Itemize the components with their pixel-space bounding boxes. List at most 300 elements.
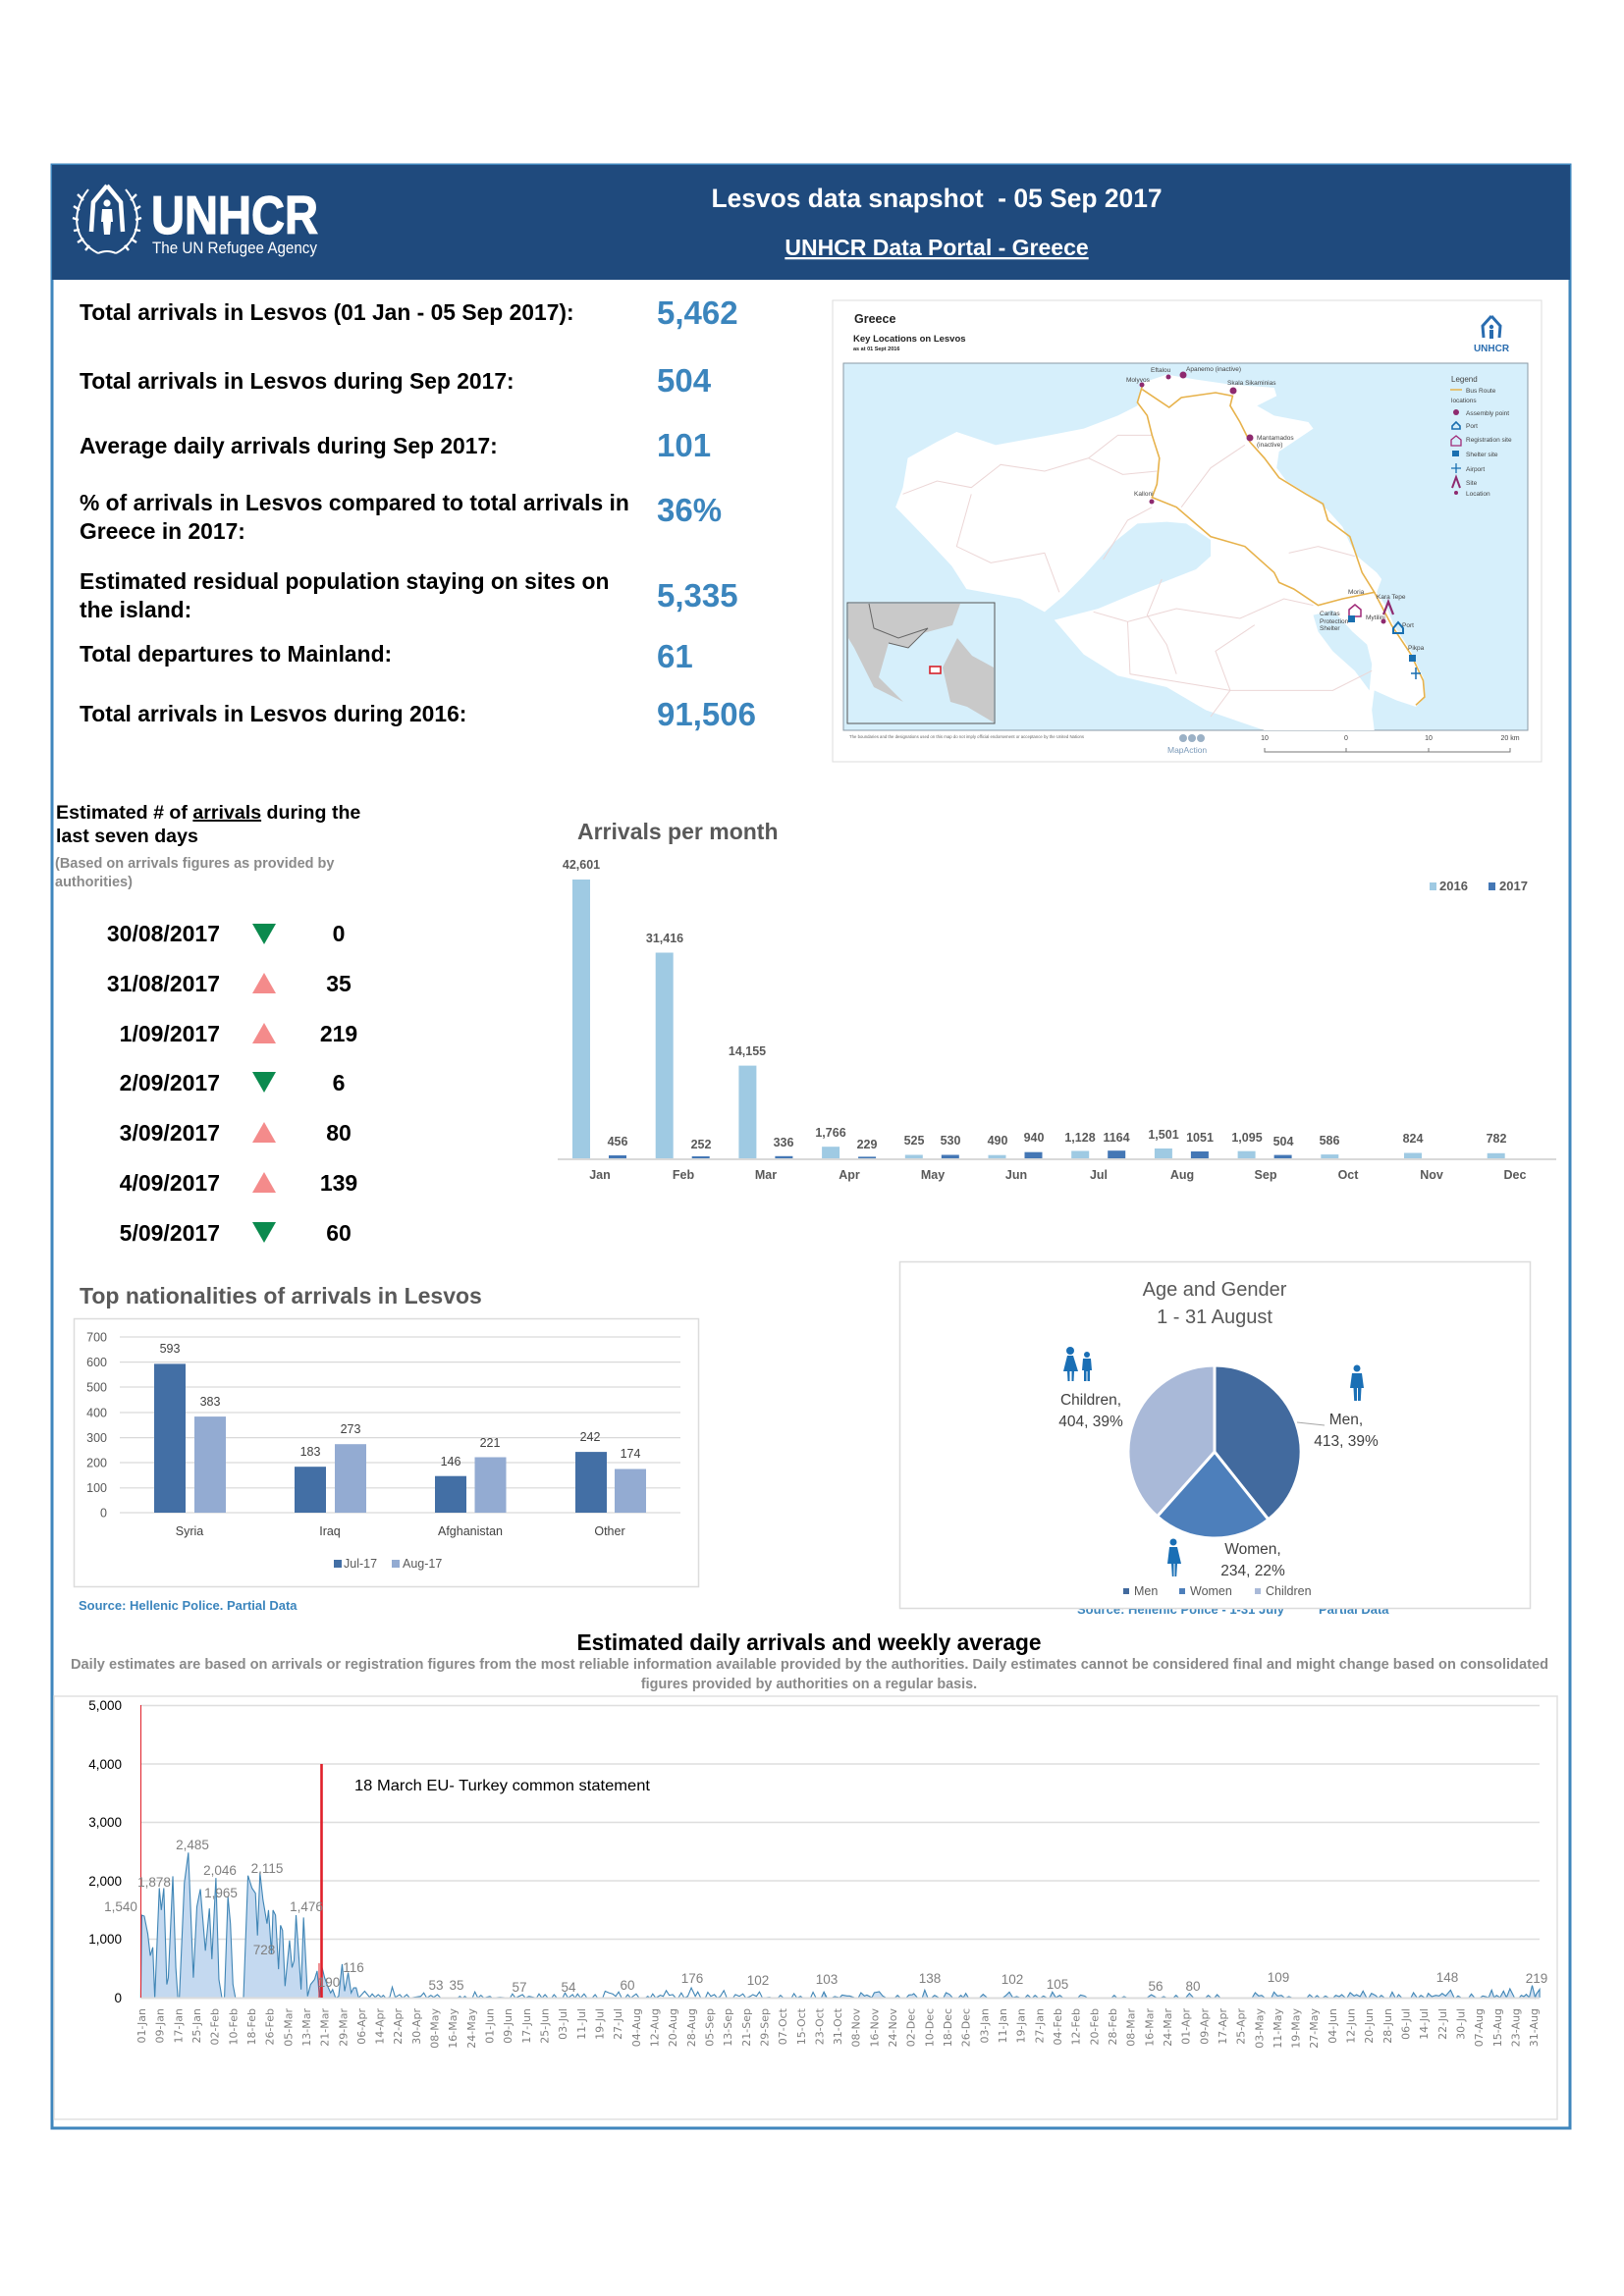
categories: Other — [594, 1524, 625, 1538]
date axis labels: 03-May — [1253, 2008, 1266, 2049]
date axis labels: 25-Apr — [1235, 2008, 1248, 2045]
y axis — [88, 1698, 122, 2005]
y axis — [86, 1331, 107, 1520]
bar values — [160, 1342, 640, 1468]
map footer: 10 — [1261, 735, 1269, 742]
pie legend: Children — [1266, 1584, 1312, 1598]
bar values: 593 — [160, 1342, 180, 1356]
date axis labels: 20-Jun — [1363, 2008, 1376, 2044]
date axis labels: 26-Dec — [960, 2008, 973, 2047]
date axis labels: 14-Apr — [374, 2008, 387, 2045]
data labels: 2,046 — [203, 1863, 237, 1878]
month axis labels: Aug — [1170, 1168, 1194, 1182]
data labels: 1,965 — [204, 1886, 238, 1900]
month data labels: 525 — [904, 1134, 924, 1148]
map legend: Site — [1466, 480, 1478, 487]
month data labels: 456 — [608, 1135, 627, 1148]
month axis labels — [589, 1168, 1527, 1182]
row: 30/08/2017: 30/08/2017 — [107, 921, 220, 946]
map logo: UNHCR — [1474, 344, 1510, 354]
date axis labels: 06-Apr — [355, 2008, 368, 2045]
seven-day heading: Estimated # of arrivals during the — [56, 802, 360, 824]
month data labels: 42,601 — [563, 858, 600, 872]
y axis: 2,000 — [88, 1874, 122, 1889]
y axis: 5,000 — [88, 1698, 122, 1713]
date axis labels: 24-May — [465, 2008, 478, 2049]
month axis labels: Jun — [1005, 1168, 1027, 1182]
date axis labels: 25-Jan — [190, 2008, 203, 2044]
data labels: 102 — [747, 1973, 769, 1988]
stat: 2016 arrivals: 91,506 — [657, 696, 756, 732]
map place labels: Moria — [1348, 589, 1365, 596]
month axis labels: Jan — [589, 1168, 611, 1182]
date axis labels: 17-Jan — [172, 2008, 185, 2044]
row: 3/09/2017: 3/09/2017 — [120, 1120, 220, 1146]
month data labels: 1,766 — [815, 1126, 846, 1140]
stat: 2016 arrivals: Total arrivals in Lesvos during 2016: — [80, 701, 466, 726]
date axis labels: 29-Sep — [758, 2008, 771, 2047]
map heading — [853, 312, 966, 352]
date axis labels: 09-Jan — [154, 2008, 167, 2044]
zero axis line — [140, 1997, 1540, 1999]
label: women: 234, 22% — [1220, 1563, 1285, 1579]
label: men: Men, — [1329, 1412, 1363, 1428]
date axis labels: 22-Jul — [1436, 2008, 1449, 2040]
data labels — [104, 1838, 1547, 1995]
month axis labels: Sep — [1255, 1168, 1277, 1182]
row: 31/08/2017 — [107, 971, 352, 996]
row: 1/09/2017 — [120, 1021, 357, 1046]
bar values: 174 — [621, 1447, 640, 1461]
date axis labels: 26-Feb — [264, 2008, 277, 2045]
map footer — [849, 734, 1520, 755]
stat: arrivals in Sep: Total arrivals in Lesvos during Sep 2017: — [80, 368, 514, 394]
row: 30/08/2017: 0 — [333, 921, 345, 946]
data labels: 109 — [1268, 1970, 1289, 1985]
map heading: as at 01 Sept 2016 — [853, 347, 899, 352]
map heading: Greece — [854, 312, 895, 326]
month axis labels: Jul — [1090, 1168, 1108, 1182]
logo tagline: The UN Refugee Agency — [152, 240, 318, 257]
seven-day arrivals panel — [55, 802, 360, 1246]
y axis: 1,000 — [88, 1932, 122, 1947]
bar values: 383 — [200, 1395, 220, 1409]
row: 4/09/2017 — [120, 1170, 357, 1196]
data labels: 728 — [253, 1943, 275, 1957]
daily chart note second line: figures provided by authorities on a regular basis. — [641, 1677, 977, 1692]
date axis labels: 05-Sep — [703, 2008, 717, 2047]
map legend: Location — [1466, 491, 1490, 498]
row: 1/09/2017: 1/09/2017 — [120, 1021, 220, 1046]
date axis labels: 03-Jul — [557, 2008, 569, 2040]
stat: share of Greece: 36% — [657, 492, 722, 528]
legend: Jul-17 / Aug-17 — [334, 1557, 442, 1571]
y axis: 200 — [86, 1457, 107, 1470]
stat: share of Greece: Greece in 2017: — [80, 518, 245, 544]
data labels: 56 — [1148, 1979, 1164, 1994]
red reference lines — [141, 1705, 322, 1998]
daily series 2016-2017 tail — [822, 1986, 1540, 1998]
data labels: 2,115 — [251, 1861, 283, 1876]
data labels: 1,540 — [104, 1899, 137, 1914]
month axis labels: Apr — [839, 1168, 860, 1182]
map legend — [1450, 375, 1512, 498]
map footer: 10 — [1425, 735, 1433, 742]
date axis labels: 20-Feb — [1088, 2008, 1101, 2045]
stat: arrivals in Sep — [80, 362, 712, 399]
stat: average daily: 101 — [657, 427, 711, 463]
clipped source note behind pie panel: Partial Data — [1319, 1602, 1389, 1617]
pie legend: Men — [1134, 1584, 1158, 1598]
seven-day heading: last seven days — [56, 826, 198, 847]
map legend: Port — [1466, 423, 1478, 430]
data labels: 102 — [1001, 1972, 1023, 1987]
y axis: 0 — [100, 1506, 107, 1520]
month data labels: 504 — [1273, 1135, 1293, 1148]
date axis labels: 04-Aug — [630, 2008, 643, 2047]
stat: average daily: Average daily arrivals during Sep 2017: — [80, 433, 498, 458]
month axis labels: Mar — [755, 1168, 777, 1182]
date axis labels: 31-Oct — [832, 2007, 844, 2045]
date axis labels: 27-Jul — [612, 2008, 624, 2040]
date axis labels: 21-Sep — [740, 2008, 753, 2047]
logo wordmark: UNHCR — [151, 185, 318, 245]
data labels: 1,476 — [290, 1899, 323, 1914]
icon: UNHCR emblem — [73, 186, 141, 253]
date axis labels: 19-Jul — [593, 2008, 607, 2040]
legend: 2016 / 2017: 2017 — [1499, 879, 1528, 893]
date axis labels: 15-Oct — [795, 2007, 808, 2045]
month data labels: 1164 — [1103, 1131, 1130, 1145]
month data labels: 1051 — [1186, 1131, 1214, 1145]
map legend: Legend — [1451, 375, 1478, 384]
date axis labels: 12-Feb — [1070, 2008, 1083, 2045]
month axis labels: Nov — [1420, 1168, 1443, 1182]
categories: Iraq — [319, 1524, 341, 1538]
date axis labels: 28-Aug — [685, 2008, 698, 2047]
map markers — [1139, 371, 1421, 679]
date axis labels: 09-Jun — [502, 2008, 514, 2044]
date axis labels: 16-May — [447, 2008, 460, 2049]
page frame — [52, 165, 1570, 2128]
daily series 2016 early peak — [140, 1852, 835, 1998]
map place labels: Apanemo (inactive) — [1186, 366, 1241, 373]
data labels: 138 — [919, 1971, 941, 1986]
stat: total arrivals: Total arrivals in Lesvos (01 Jan - 05 Sep 2017): — [80, 299, 574, 325]
date axis labels: 12-Jun — [1345, 2008, 1358, 2044]
map place labels: Eftalou — [1151, 367, 1171, 374]
row: 2/09/2017 — [120, 1070, 345, 1095]
month data labels: 824 — [1403, 1132, 1423, 1146]
map footer: 20 km — [1500, 735, 1520, 742]
date axis labels: 01-Jun — [483, 2008, 497, 2044]
map place labels: Pikpa — [1408, 645, 1425, 652]
map legend: Registration site — [1466, 437, 1512, 444]
map place labels: Skala Sikaminias — [1227, 380, 1276, 387]
map sea — [843, 363, 1528, 730]
date axis labels: 29-Mar — [337, 2008, 350, 2047]
portal link: UNHCR Data Portal - Greece — [785, 235, 1089, 260]
map legend: Bus Route — [1466, 388, 1496, 395]
month data labels: 586 — [1320, 1134, 1339, 1148]
date axis labels: 30-Jul — [1455, 2008, 1467, 2040]
data labels: 219 — [1526, 1971, 1547, 1986]
date axis labels: 11-Jan — [997, 2008, 1009, 2044]
y axis: 700 — [86, 1331, 107, 1345]
month data labels: 1,095 — [1231, 1131, 1263, 1145]
date axis labels: 28-Jun — [1381, 2008, 1394, 2044]
map panel — [833, 300, 1542, 762]
map legend: locations — [1451, 398, 1477, 404]
map legend: Airport — [1466, 466, 1485, 473]
bar values: 146 — [441, 1455, 460, 1468]
month data labels: 1,128 — [1064, 1131, 1096, 1145]
label: women: Women, — [1224, 1541, 1281, 1558]
date axis labels: 04-Feb — [1052, 2008, 1064, 2045]
date axis labels: 28-Feb — [1107, 2008, 1119, 2045]
map place labels: Protection — [1320, 618, 1349, 625]
date axis labels: 08-May — [429, 2008, 442, 2049]
map legend: Assembly point — [1466, 410, 1509, 417]
date axis labels: 16-Nov — [868, 2008, 881, 2047]
label: men: 413, 39% — [1314, 1433, 1379, 1450]
date axis labels: 02-Dec — [905, 2008, 918, 2047]
row: 31/08/2017: 31/08/2017 — [107, 971, 220, 996]
pie legend — [1123, 1584, 1312, 1598]
stat: residual population: Estimated residual population staying on sites on — [80, 568, 609, 594]
date axis labels: 23-Aug — [1510, 2008, 1522, 2047]
callout: EU-Turkey statement: 18 March EU- Turkey common statement — [354, 1778, 651, 1794]
y axis: 0 — [114, 1991, 122, 2005]
stat: departures — [80, 638, 693, 674]
map legend: Shelter site — [1466, 452, 1498, 458]
y axis: 500 — [86, 1380, 107, 1394]
y axis: 3,000 — [88, 1815, 122, 1830]
date axis labels: 21-Mar — [319, 2008, 332, 2047]
label: children: Children, — [1060, 1392, 1121, 1409]
legend: 2016 / 2017: 2016 — [1439, 879, 1468, 893]
stat: residual population: 5,335 — [657, 577, 738, 614]
legend: 2016 / 2017 — [1430, 879, 1528, 893]
row: 5/09/2017: 5/09/2017 — [120, 1220, 220, 1246]
header band — [52, 165, 1570, 280]
row: 4/09/2017: 4/09/2017 — [120, 1170, 220, 1196]
stat: share of Greece: % of arrivals in Lesvos compared to total arrivals in — [80, 490, 629, 515]
date axis labels: 10-Feb — [227, 2008, 240, 2045]
icon: woman — [1167, 1539, 1181, 1576]
data labels: 53 — [428, 1978, 444, 1993]
month data labels: 940 — [1024, 1131, 1044, 1145]
bars Jul-17 — [154, 1363, 607, 1513]
title: Lesvos data snapshot - 05 Sep 2017 — [711, 184, 1163, 213]
data labels: 105 — [1047, 1977, 1068, 1992]
date axis labels: 22-Apr — [392, 2008, 405, 2045]
bars Aug-17 — [194, 1416, 646, 1513]
date axis labels: 23-Oct — [813, 2007, 826, 2045]
seven-day note: (Based on arrivals figures as provided by — [55, 856, 334, 872]
daily chart note: Daily estimates are based on arrivals or registration figures from the most reliable information available provided by the authorities. Daily estimates cannot be considered final and might change based on consolidated — [71, 1657, 1548, 1673]
pie title: Age and Gender — [1143, 1279, 1287, 1301]
y axis: 4,000 — [88, 1757, 122, 1772]
map heading: Key Locations on Lesvos — [853, 334, 966, 345]
stat: arrivals in Sep: 504 — [657, 362, 712, 399]
date axis labels: 06-Jul — [1400, 2008, 1412, 2040]
row: 5/09/2017 — [120, 1220, 352, 1246]
map footer: MapAction — [1167, 745, 1207, 755]
data labels: 148 — [1436, 1970, 1458, 1985]
row: 1/09/2017: 219 — [320, 1021, 357, 1046]
categories: Afghanistan — [438, 1524, 503, 1538]
date axis labels: 12-Aug — [648, 2008, 662, 2047]
map place labels: Kalloni — [1134, 491, 1154, 498]
date axis labels: 08-Mar — [1125, 2008, 1138, 2047]
bar values: 183 — [300, 1445, 320, 1459]
date axis labels: 24-Nov — [887, 2008, 899, 2047]
icon: children — [1063, 1347, 1092, 1381]
seven-day note: authorities) — [55, 875, 133, 890]
map footer: 0 — [1344, 735, 1348, 742]
row: 2/09/2017: 2/09/2017 — [120, 1070, 220, 1095]
stat: departures: 61 — [657, 638, 693, 674]
row: 3/09/2017 — [120, 1120, 352, 1146]
row: 4/09/2017: 139 — [320, 1170, 357, 1196]
month data labels: 530 — [941, 1134, 960, 1148]
map place labels: Kara Tepe — [1377, 594, 1406, 601]
pie chart — [1128, 1365, 1301, 1538]
stat: residual population: the island: — [80, 597, 191, 622]
month axis labels: Oct — [1338, 1168, 1359, 1182]
date axis labels: 02-Feb — [209, 2008, 222, 2045]
data labels: 57 — [512, 1980, 527, 1995]
month data labels — [563, 858, 1506, 1151]
date axis labels: 15-Aug — [1491, 2008, 1504, 2047]
data labels: 190 — [318, 1975, 340, 1990]
date axis labels — [135, 2007, 1541, 2049]
row: 2/09/2017: 6 — [333, 1070, 345, 1095]
month data labels: 252 — [691, 1138, 711, 1151]
date axis labels: 07-Oct — [777, 2007, 789, 2045]
bar chart: arrivals per month — [558, 858, 1556, 1182]
map footer: The boundaries and the designations used on this map do not imply official endorsement or acceptance by the United Nations — [849, 734, 1084, 739]
date axis labels: 03-Jan — [978, 2008, 991, 2044]
date axis labels: 17-Apr — [1217, 2008, 1229, 2045]
heading: daily arrivals: Estimated daily arrivals and weekly average — [577, 1629, 1041, 1655]
icon: man — [1350, 1364, 1364, 1401]
date axis labels: 25-Jun — [538, 2008, 552, 2044]
month data labels: 31,416 — [646, 932, 683, 945]
date axis labels: 11-May — [1272, 2008, 1284, 2049]
date axis labels: 10-Dec — [923, 2008, 936, 2047]
date axis labels: 19-Jan — [1015, 2008, 1028, 2044]
date axis labels: 20-Aug — [667, 2008, 679, 2047]
legend: Jul-17 / Aug-17: Jul-17 — [344, 1557, 377, 1571]
categories: Syria — [176, 1524, 203, 1538]
data labels: 1,878 — [137, 1875, 171, 1890]
bar values: 273 — [341, 1422, 360, 1436]
inset locator map — [847, 603, 995, 723]
bars 2017 — [609, 1150, 1292, 1158]
map place labels: Shelter — [1320, 625, 1340, 632]
month axis labels: May — [921, 1168, 945, 1182]
date axis labels: 13-Mar — [300, 2008, 313, 2047]
data labels: 54 — [561, 1980, 576, 1995]
date axis labels: 04-Jun — [1326, 2008, 1339, 2044]
row: 3/09/2017: 80 — [326, 1120, 352, 1146]
date axis labels: 08-Nov — [850, 2008, 863, 2047]
bar values: 221 — [480, 1436, 500, 1450]
data labels: 35 — [449, 1978, 464, 1993]
date axis labels: 07-Aug — [1473, 2008, 1486, 2047]
month axis labels: Feb — [673, 1168, 694, 1182]
map place labels: (inactive) — [1257, 442, 1282, 449]
month data labels: 782 — [1487, 1132, 1506, 1146]
bar values: 242 — [580, 1430, 600, 1444]
y axis: 300 — [86, 1431, 107, 1445]
month data labels: 490 — [988, 1134, 1007, 1148]
date axis labels: 24-Mar — [1162, 2008, 1174, 2047]
date axis labels: 09-Apr — [1198, 2008, 1211, 2045]
legend: Jul-17 / Aug-17: Aug-17 — [403, 1557, 442, 1571]
date axis labels: 14-Jul — [1418, 2008, 1431, 2040]
pie title: 1 - 31 August — [1157, 1307, 1272, 1328]
data labels: 116 — [343, 1960, 364, 1975]
stat: share of Greece — [80, 490, 722, 544]
month data labels: 1,501 — [1148, 1128, 1179, 1142]
date axis labels: 01-Jan — [135, 2008, 148, 2044]
data labels: 2,485 — [176, 1838, 209, 1852]
stat: average daily — [80, 427, 711, 463]
date axis labels: 27-May — [1308, 2008, 1321, 2049]
key figures panel — [80, 294, 756, 732]
panel: age and gender — [899, 1262, 1530, 1608]
clipped source note behind pie panel: Source: Hellenic Police - 1-31 July — [1077, 1602, 1285, 1617]
date axis labels: 30-Apr — [410, 2008, 423, 2045]
month data labels: 14,155 — [729, 1044, 766, 1058]
date axis labels: 18-Feb — [245, 2008, 258, 2045]
date axis labels: 31-Aug — [1528, 2008, 1541, 2047]
stat: total arrivals — [80, 294, 738, 331]
month axis labels: Dec — [1504, 1168, 1527, 1182]
y axis: 100 — [86, 1481, 107, 1495]
date axis labels: 11-Jul — [575, 2008, 588, 2040]
date axis labels: 05-Mar — [282, 2008, 295, 2047]
map place labels — [1126, 366, 1425, 652]
categories — [176, 1524, 625, 1538]
stat: total arrivals: 5,462 — [657, 294, 738, 331]
map place labels: Mantamados — [1257, 435, 1294, 442]
island of Lesvos — [895, 375, 1426, 730]
data labels: 80 — [1185, 1979, 1201, 1994]
heading: top nationalities: Top nationalities of arrivals in Lesvos — [80, 1283, 482, 1308]
date axis labels: 18-Dec — [942, 2008, 954, 2047]
label: children: 404, 39% — [1058, 1414, 1123, 1430]
bar chart: nationalities — [75, 1319, 699, 1586]
data labels: 60 — [620, 1978, 635, 1993]
row: 31/08/2017: 35 — [326, 971, 352, 996]
data labels: 103 — [816, 1972, 838, 1987]
date axis labels: 19-May — [1290, 2008, 1303, 2049]
y axis: 600 — [86, 1356, 107, 1369]
label: men — [1297, 1412, 1379, 1450]
stat: 2016 arrivals — [80, 696, 756, 732]
pie legend: Women — [1190, 1584, 1232, 1598]
date axis labels: 13-Sep — [722, 2008, 734, 2047]
map place labels: Molyvos — [1126, 377, 1151, 384]
bars 2016 — [572, 880, 1505, 1158]
stat: departures: Total departures to Mainland: — [80, 641, 392, 667]
row: 5/09/2017: 60 — [326, 1220, 352, 1246]
row: 30/08/2017 — [107, 921, 345, 946]
